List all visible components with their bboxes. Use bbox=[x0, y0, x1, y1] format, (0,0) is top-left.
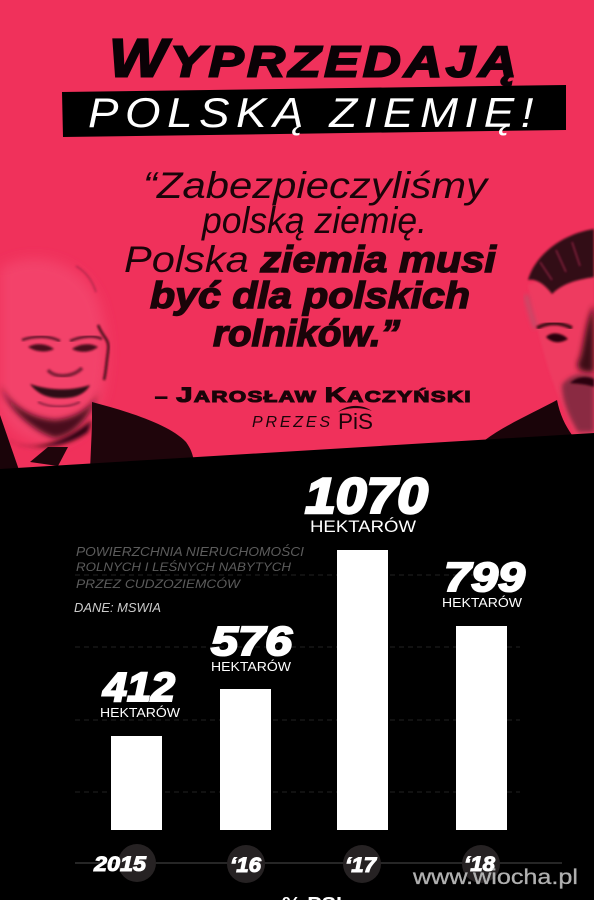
photo: Jan Krzysztof Ardanowski bbox=[485, 229, 594, 442]
chart caption bbox=[76, 544, 304, 591]
quote attribution: – J AROSŁAW K ACZYŃSKI bbox=[155, 384, 472, 407]
quote text: być dla polskich bbox=[150, 275, 470, 316]
bar: 2015: HEKTARÓW bbox=[100, 705, 181, 720]
title: Wyprzedają: W bbox=[109, 28, 172, 88]
bar: 2017: 1070 bbox=[305, 468, 428, 524]
chart: gridlines bbox=[75, 575, 520, 792]
bar: 2017: HEKTARÓW bbox=[310, 517, 416, 536]
bar: 2016 bbox=[211, 618, 293, 830]
logo: PiS: PiS bbox=[338, 409, 373, 434]
timeline axis: ‘17 bbox=[345, 854, 377, 877]
title: Wyprzedają bbox=[109, 28, 520, 88]
panel: black lower section bbox=[0, 433, 594, 900]
chart caption: POWIERZCHNIA NIERUCHOMOŚCI bbox=[76, 544, 304, 559]
quote text bbox=[124, 165, 497, 354]
photo: Jarosław Kaczyński bbox=[0, 259, 194, 470]
timeline axis: 2015 bbox=[93, 853, 146, 876]
quote text: polską ziemię. bbox=[201, 200, 427, 241]
timeline axis bbox=[75, 844, 562, 883]
title banner: Polską ziemię: POLSKĄ ZIEMIĘ! bbox=[88, 89, 540, 136]
timeline axis: ‘16 bbox=[230, 854, 261, 877]
timeline axis: ‘18 bbox=[464, 853, 495, 876]
bar: 2016: HEKTARÓW bbox=[211, 659, 292, 674]
quote attribution: PREZES bbox=[252, 414, 330, 431]
chart caption: PRZEZ CUDZOZIEMCÓW bbox=[76, 576, 242, 591]
bar: 2018: 799 bbox=[444, 554, 525, 600]
bar: 2015: 412 bbox=[102, 664, 175, 710]
bar: 2018 bbox=[442, 554, 525, 830]
bar: 2018: HEKTARÓW bbox=[442, 595, 523, 610]
quote text: “Zabezpieczyliśmy bbox=[143, 165, 490, 206]
bar: 2016: 576 bbox=[211, 618, 293, 664]
data source: DANE: MSWIA bbox=[74, 600, 161, 615]
bar: 2017 bbox=[305, 468, 428, 830]
quote text: rolników.” bbox=[213, 313, 401, 354]
quote text: Polska ziemia musi bbox=[124, 239, 497, 280]
panel: pink header background bbox=[0, 0, 594, 480]
title: Wyprzedają: YPRZEDAJĄ bbox=[170, 38, 520, 86]
chart caption: ROLNYCH I LEŚNYCH NABYTYCH bbox=[76, 559, 291, 574]
quote attribution bbox=[155, 384, 472, 434]
watermark: www.wiocha.pl bbox=[412, 866, 578, 889]
bar: 2015 bbox=[100, 664, 181, 830]
